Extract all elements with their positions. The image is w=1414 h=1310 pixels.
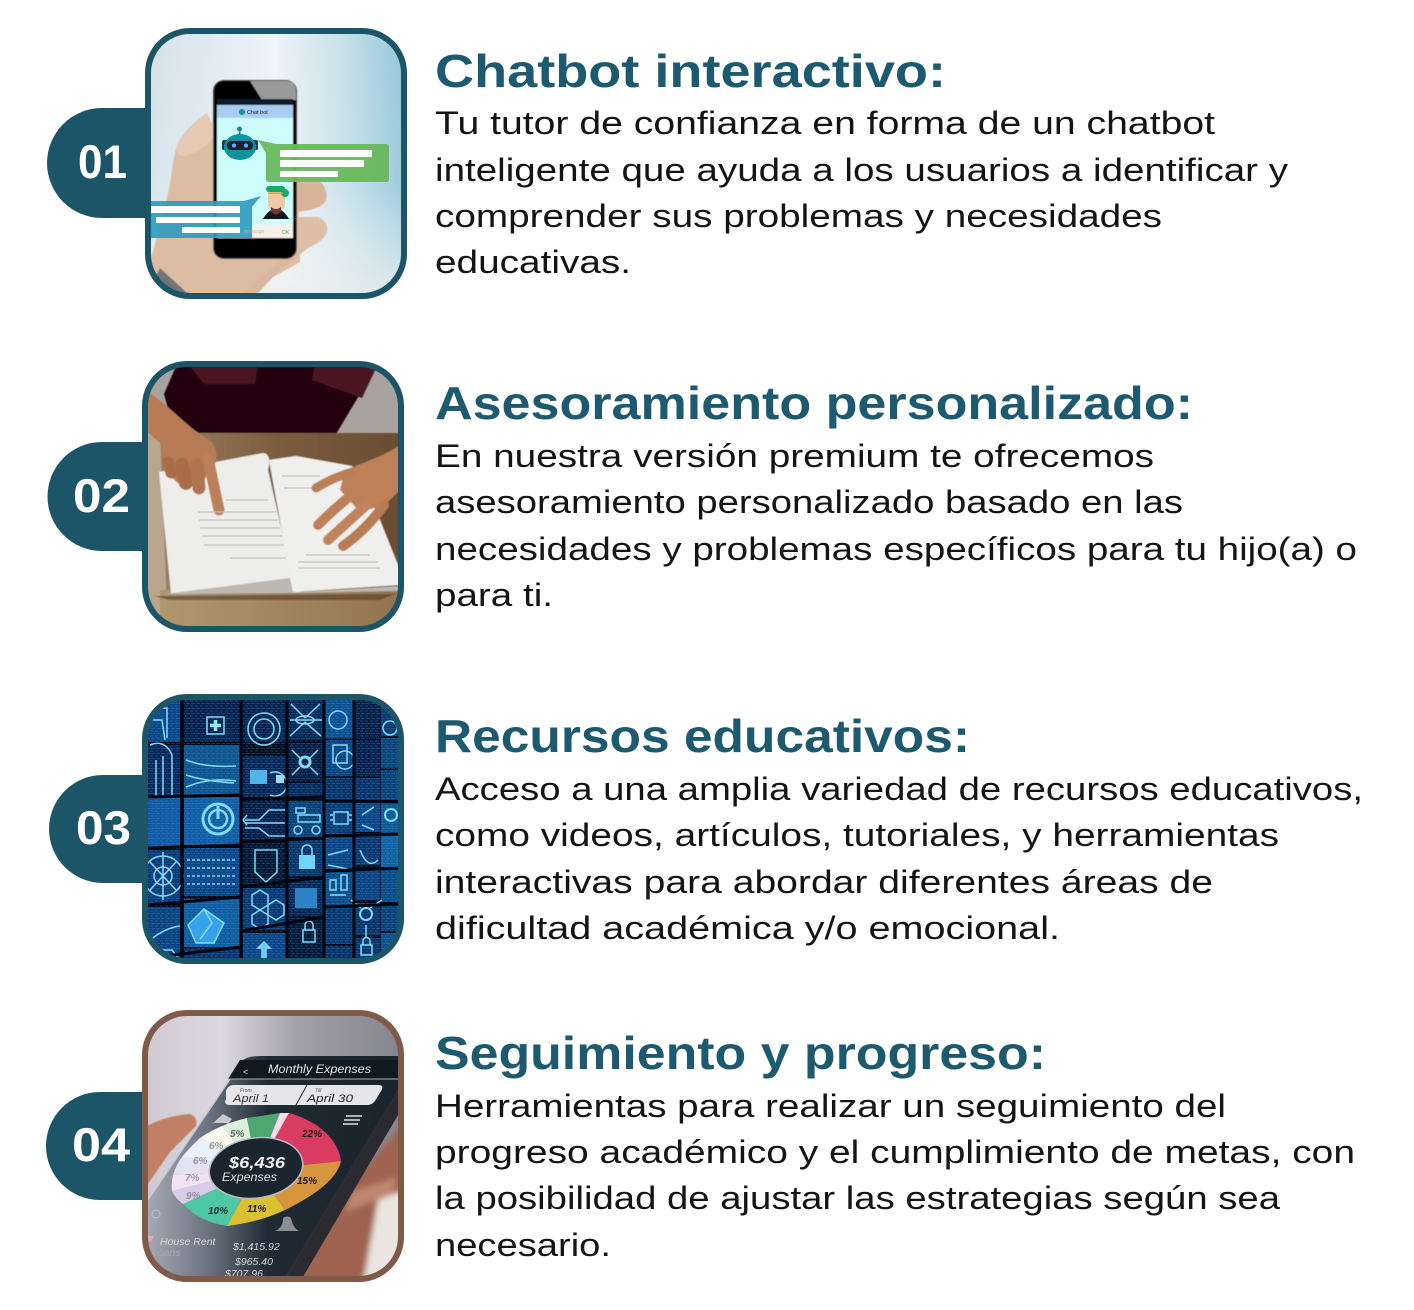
photo frame 04 [145, 1013, 401, 1279]
photo frame 03 [145, 697, 401, 961]
chat bubble: green [258, 140, 389, 182]
app header: Monthly Expenses [268, 1064, 371, 1076]
text block 02: asesoramiento personalizado basado en las [435, 484, 1183, 520]
donut chart: 5% [230, 1129, 245, 1140]
text block 01 [435, 105, 1288, 280]
text block 01: comprender sus problemas y necesidades [435, 198, 1162, 234]
text block 03: Acceso a una amplia variedad de recursos educativos, [435, 771, 1363, 807]
row 4: seguimiento y progreso [46, 1013, 1355, 1290]
row 3: recursos educativos [49, 697, 1363, 961]
book text lines [198, 476, 380, 568]
heading 03: Recursos educativos: [435, 710, 970, 762]
heading 02: Asesoramiento personalizado: [435, 377, 1193, 429]
screen icons [143, 704, 397, 960]
text block 04: Herramientas para realizar un seguimiento del [435, 1088, 1226, 1124]
donut chart: 6% [193, 1156, 208, 1167]
photo: hand holding phone with chatbot [148, 31, 404, 298]
expense list: $707.96 [224, 1268, 263, 1280]
screen texture [145, 697, 401, 961]
donut chart: 22% [301, 1129, 322, 1140]
photo frame 01 [148, 31, 404, 296]
date range: April 1 [232, 1093, 269, 1105]
screen gaps [148, 700, 401, 961]
number tab 02 [47, 442, 160, 551]
expense list: $1,415.92 [232, 1241, 280, 1253]
photo: hands on open book [145, 364, 401, 633]
donut chart: 6% [209, 1141, 224, 1152]
donut chart: 15% [297, 1176, 317, 1187]
date range: April 30 [306, 1093, 354, 1105]
date range: Till [315, 1088, 322, 1094]
text block 03 [435, 771, 1363, 946]
text block 04: la posibilidad de ajustar las estrategias según sea [435, 1180, 1280, 1216]
text block 02 [435, 438, 1357, 613]
date range [225, 1085, 382, 1105]
text block 03: como videos, artículos, tutoriales, y herramientas [435, 817, 1279, 853]
text block 02: En nuestra versión premium te ofrecemos [435, 438, 1154, 474]
icon: user avatar [263, 186, 289, 219]
number tab 01 [47, 108, 160, 218]
donut chart: Expenses [222, 1170, 277, 1184]
photo: phone with monthly expenses donut chart [148, 1016, 398, 1276]
text block 01: Tu tutor de confianza en forma de un chatbot [435, 105, 1215, 141]
text block 04: necesario. [435, 1227, 611, 1263]
hand: right on page [316, 445, 401, 546]
expense list [147, 1236, 280, 1280]
heading 04: Seguimiento y progreso: [435, 1027, 1046, 1079]
donut chart: 7% [185, 1173, 200, 1184]
text block 03: dificultad académica y/o emocional. [435, 910, 1060, 946]
text block 02: necesidades y problemas específicos para tu hijo(a) o [435, 531, 1357, 567]
screen dimming [145, 697, 401, 961]
expense list: Loans [152, 1247, 181, 1259]
photo frame 02 [145, 364, 401, 629]
donut chart: 10% [208, 1206, 228, 1217]
text block 01: inteligente que ayuda a los usuarios a identificar y [435, 152, 1288, 188]
expense list: House Rent [160, 1236, 217, 1248]
phone screen labels: message [244, 229, 265, 235]
number tab 01: 01 [78, 135, 127, 188]
donut chart: $6,436 [228, 1155, 285, 1172]
photo: wall of digital blue screens [143, 697, 401, 961]
number tab 03 [49, 775, 160, 883]
row 2: asesoramiento personalizado [47, 364, 1357, 633]
donut chart [172, 1113, 341, 1226]
text block 01: educativas. [435, 244, 631, 280]
phone screen labels: Chat bot [247, 110, 268, 116]
hand: left thumb [145, 1114, 196, 1188]
date range: From [240, 1088, 252, 1094]
app header: < [243, 1067, 248, 1077]
hand: left pointing [145, 390, 219, 510]
number tab 04: 04 [72, 1118, 130, 1171]
heading 01: Chatbot interactivo: [435, 45, 946, 97]
phone body [145, 1056, 401, 1282]
phone screen labels [239, 109, 290, 236]
number tab 03: 03 [76, 801, 131, 854]
number tab 02: 02 [73, 469, 130, 522]
chat bubble: blue [151, 196, 261, 238]
number tab 04 [46, 1092, 160, 1200]
text block 02: para ti. [435, 577, 553, 613]
text block 04 [435, 1088, 1355, 1263]
app header [228, 1060, 401, 1079]
text block 03: interactivas para abordar diferentes áreas de [435, 864, 1213, 900]
text block 04: progreso académico y el cumplimiento de metas, con [435, 1134, 1355, 1170]
icon: robot [222, 126, 258, 160]
donut chart: 11% [247, 1204, 266, 1215]
donut chart: 9% [186, 1191, 201, 1202]
hand: right fingers [304, 1126, 398, 1276]
app icons [152, 1114, 362, 1231]
expense list: $965.40 [234, 1256, 273, 1268]
row 1: chatbot interactivo [47, 31, 1288, 298]
phone screen labels: OK [282, 230, 290, 236]
